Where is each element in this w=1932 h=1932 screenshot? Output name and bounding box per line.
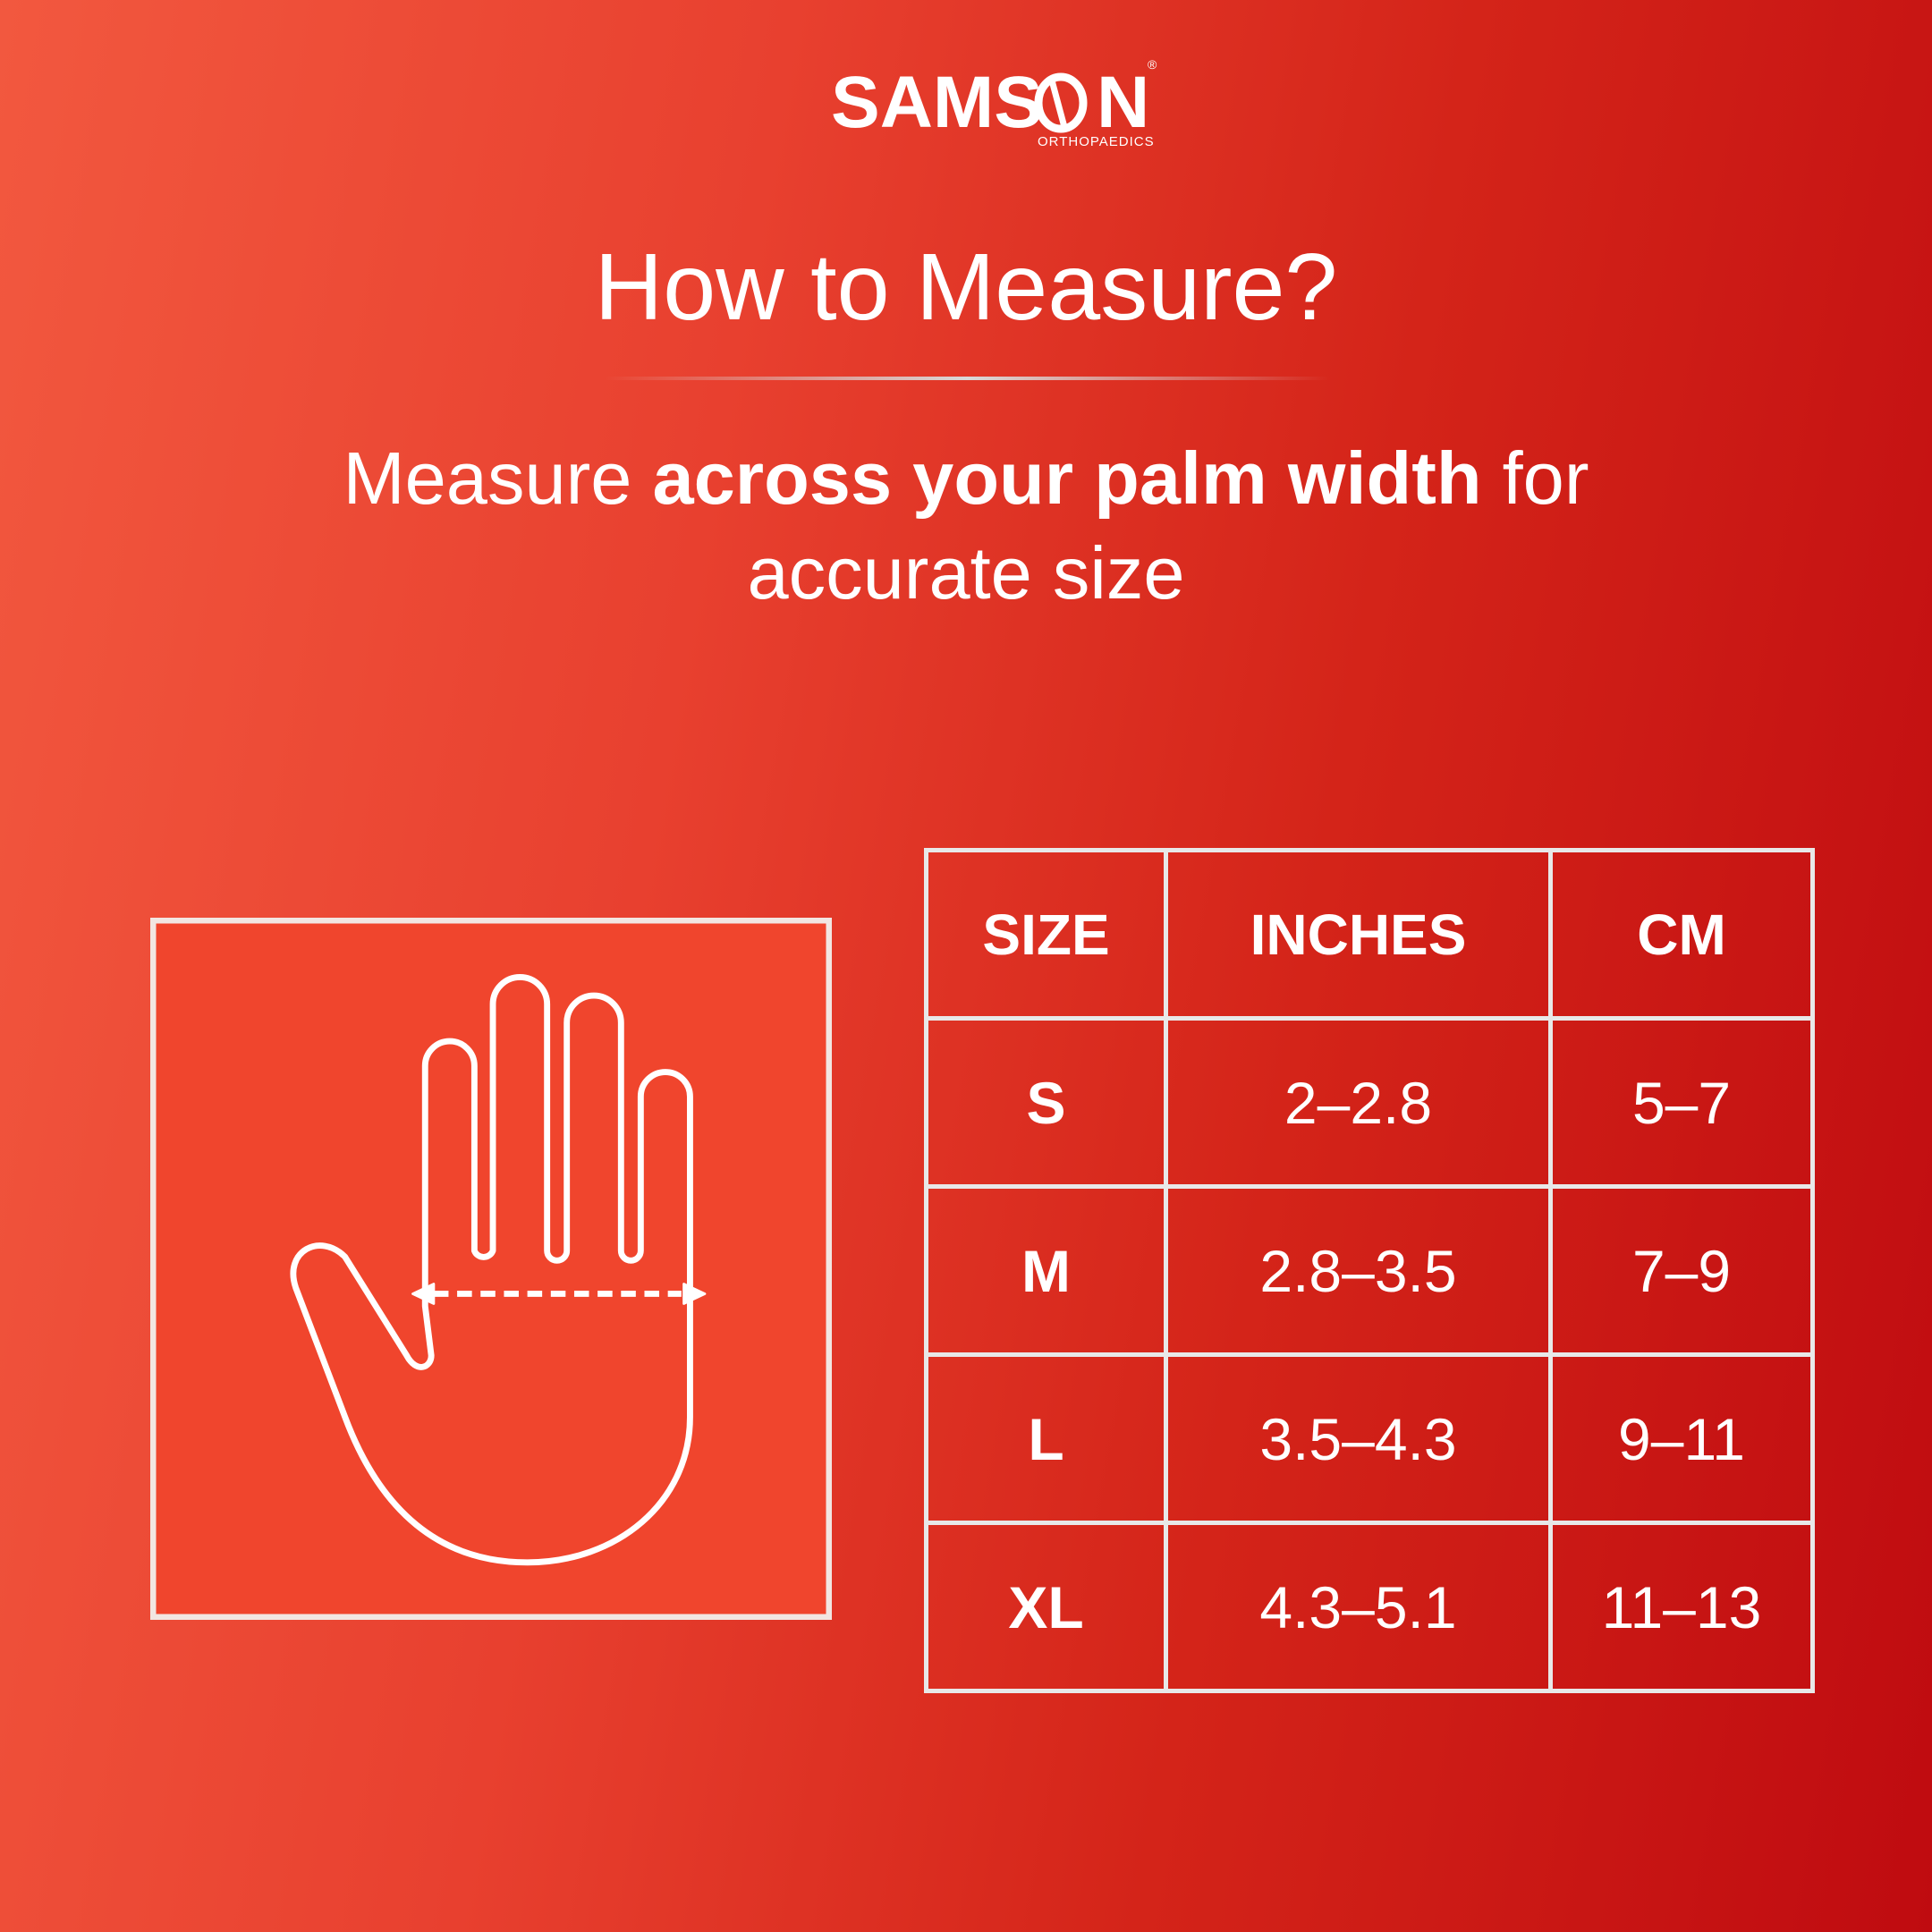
size table: 2.8–3.5 <box>1259 1238 1457 1304</box>
logo letter N: N <box>1097 62 1149 143</box>
size table: CM <box>1637 902 1726 966</box>
logo wordmark: SAMS <box>831 62 1043 143</box>
registered mark: ® <box>1148 57 1157 72</box>
size table: XL <box>1008 1574 1084 1640</box>
size table: 4.3–5.1 <box>1259 1574 1457 1640</box>
size table: 11–13 <box>1602 1574 1761 1640</box>
icon: hand outline <box>293 977 705 1563</box>
size table: 5–7 <box>1632 1070 1731 1136</box>
subtitle text <box>343 436 1589 614</box>
logo subtitle: ORTHOPAEDICS <box>1038 134 1155 149</box>
size table: INCHES <box>1250 902 1466 966</box>
size table: 3.5–4.3 <box>1259 1406 1457 1472</box>
size table: SIZE <box>982 902 1110 966</box>
size table: 7–9 <box>1632 1238 1731 1304</box>
subtitle text: accurate size <box>747 531 1184 614</box>
divider <box>604 377 1330 380</box>
subtitle text: Measure across your palm width for <box>343 436 1589 520</box>
hand illustration panel <box>150 918 832 1620</box>
size table <box>924 848 1815 1693</box>
logo <box>831 57 1157 149</box>
size table: M <box>1021 1238 1071 1304</box>
logo icon <box>1034 73 1088 132</box>
size table: 9–11 <box>1618 1406 1745 1472</box>
size table: S <box>1026 1070 1066 1136</box>
title: How to Measure? <box>595 234 1337 340</box>
size table: L <box>1028 1406 1064 1472</box>
size table: 2–2.8 <box>1284 1070 1432 1136</box>
